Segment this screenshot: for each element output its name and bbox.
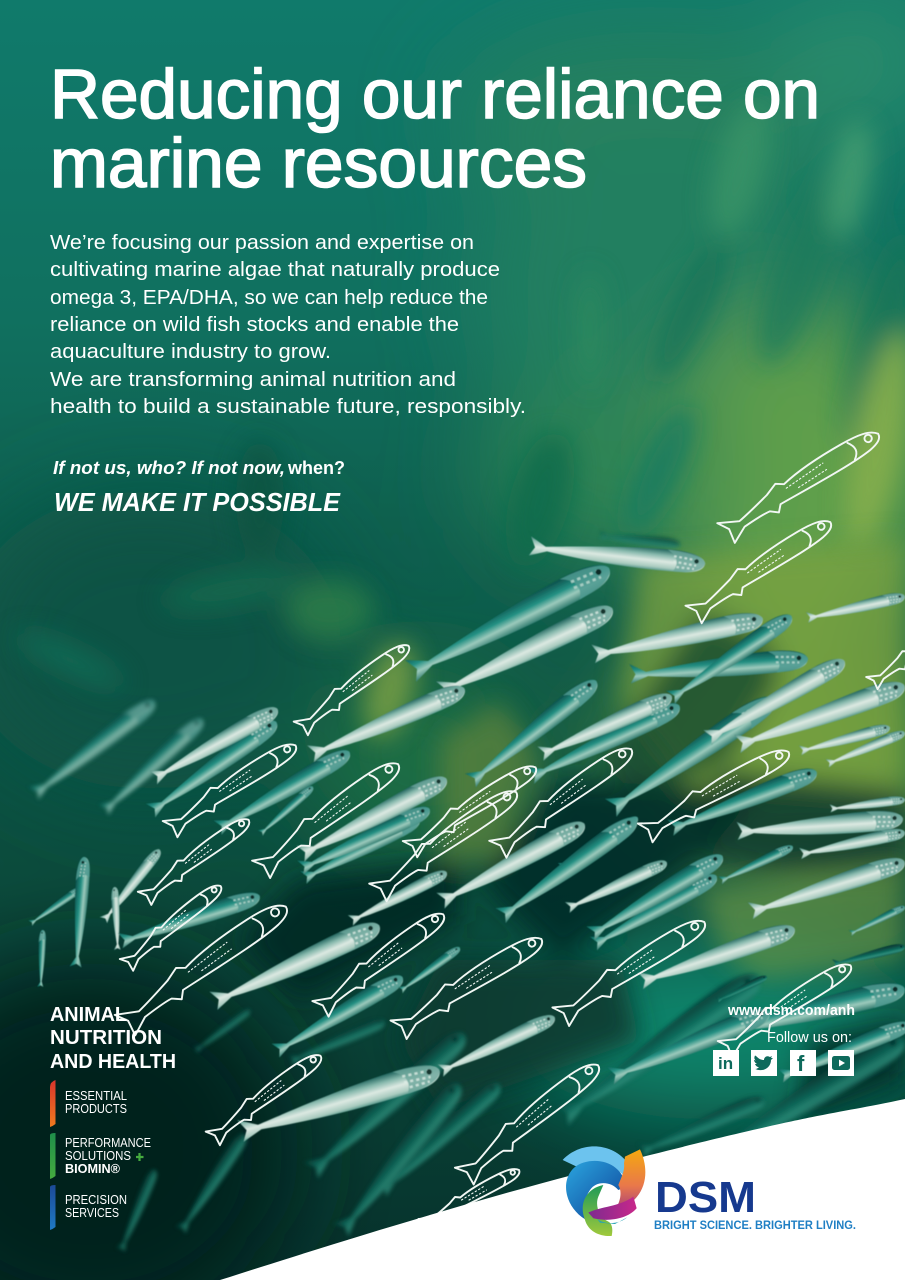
DSM slogan: BRIGHT SCIENCE. BRIGHTER LIVING. (654, 1220, 856, 1232)
performance solutions and biomin: PERFORMANCE (65, 1136, 151, 1150)
essential products (50, 1080, 127, 1127)
body text: health to build a sustainable future, responsibly. (50, 396, 526, 418)
icon: twitter (751, 1050, 777, 1076)
performance solutions and biomin: SOLUTIONS (65, 1149, 131, 1163)
tagline: WE MAKE IT POSSIBLE (54, 487, 341, 517)
precision services (50, 1185, 127, 1230)
icon: linkedin (713, 1050, 739, 1076)
DSM logo mark (563, 1146, 645, 1236)
essential products: PRODUCTS (65, 1102, 127, 1116)
icon: facebook: f (797, 1051, 805, 1076)
tagline: when? (287, 458, 345, 478)
body text: omega 3, EPA/DHA, so we can help reduce the (50, 287, 488, 309)
icon: youtube (828, 1050, 854, 1076)
performance solutions and biomin: BIOMIN® (65, 1162, 121, 1176)
tagline (53, 458, 345, 517)
body text: We are transforming animal nutrition and (50, 369, 456, 391)
essential products: ESSENTIAL (65, 1089, 127, 1103)
fish school: photographed fish (28, 534, 905, 1142)
performance solutions and biomin (50, 1133, 151, 1179)
body text: aquaculture industry to grow. (50, 341, 331, 363)
body text: cultivating marine algae that naturally produce (50, 259, 500, 281)
body text: We’re focusing our passion and expertise on (50, 232, 474, 254)
icon: linkedin: in (718, 1054, 733, 1073)
DSM wordmark: DSM (655, 1173, 756, 1222)
precision services: PRECISION (65, 1193, 127, 1207)
division name: animal nutrition and health (50, 1004, 176, 1073)
white swoosh footer (220, 1099, 905, 1280)
body text: reliance on wild fish stocks and enable the (50, 314, 459, 336)
division name: animal nutrition and health: NUTRITION (50, 1027, 162, 1049)
tagline: If not us, who? If not now, (53, 458, 285, 478)
title (50, 55, 820, 202)
title: Reducing our reliance on (50, 55, 820, 133)
body text (50, 232, 526, 418)
website link: www.dsm.com/anh (727, 1002, 855, 1019)
title: marine resources (50, 124, 587, 202)
follow us label: Follow us on: (767, 1029, 852, 1046)
icon: facebook (790, 1050, 816, 1076)
division name: animal nutrition and health: ANIMAL (50, 1004, 127, 1026)
kelp and shadow patches behind the school (240, 540, 905, 1120)
division name: animal nutrition and health: AND HEALTH (50, 1051, 176, 1073)
precision services: SERVICES (65, 1206, 119, 1220)
fish school: distant blurred fish (27, 530, 905, 1252)
fish school: white line-drawn fish (110, 426, 905, 1233)
